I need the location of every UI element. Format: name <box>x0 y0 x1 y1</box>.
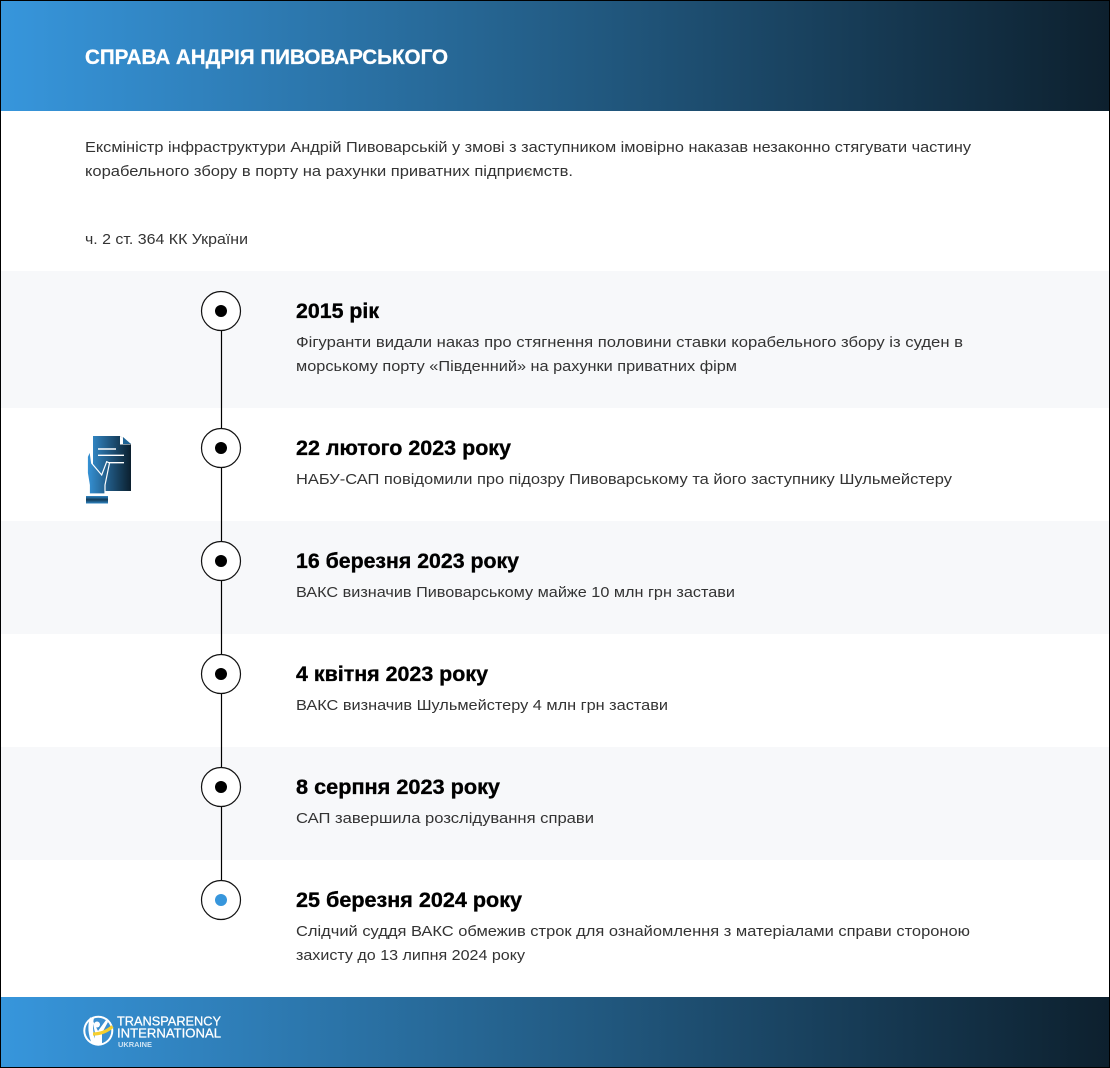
timeline entry: 4 April 2023 <box>202 654 668 714</box>
timeline entry: 25 March 2024 <box>202 880 970 964</box>
timeline entry: 22 February 2023: НАБУ-САП повідомили про підозру Пивоварському та його заступнику Шульмейстеру <box>296 471 953 488</box>
timeline entry: 16 March 2023 <box>202 542 735 601</box>
timeline entry: 25 March 2024: 25 березня 2024 року <box>296 889 522 912</box>
intro text <box>85 139 972 180</box>
timeline entry: 16 March 2023: ВАКС визначив Пивоварському майже 10 млн грн застави <box>296 584 735 601</box>
title: СПРАВА АНДРІЯ ПИВОВАРСЬКОГО <box>85 46 448 69</box>
icon: hand holding document <box>86 436 131 504</box>
timeline entry: 22 February 2023: 22 лютого 2023 року <box>296 437 511 460</box>
logo: Transparency International Ukraine: UKRAINE <box>118 1042 152 1049</box>
intro text: Ексміністр інфраструктури Андрій Пивоварській у змові з заступником імовірно наказав незаконно стягувати частину <box>85 139 972 156</box>
timeline entry: 8 August 2023 <box>202 768 594 827</box>
timeline entry: 8 August 2023: САП завершила розслідування справи <box>296 810 594 827</box>
logo: Transparency International Ukraine: TRANSPARENCY <box>117 1014 222 1028</box>
timeline entry: 25 March 2024: захисту до 13 липня 2024 року <box>296 947 526 964</box>
timeline entry: 2015: Фігуранти видали наказ про стягнення половини ставки корабельного збору із суден в <box>296 334 963 351</box>
timeline entry: 16 March 2023: 16 березня 2023 року <box>296 550 519 573</box>
timeline entry: 4 April 2023: ВАКС визначив Шульмейстеру 4 млн грн застави <box>296 697 668 714</box>
footer banner <box>1 997 1109 1067</box>
timeline entry: 2015: морському порту «Південний» на рахунки приватних фірм <box>296 358 737 375</box>
timeline vertical line <box>220 311 222 900</box>
timeline entry: 4 April 2023: 4 квітня 2023 року <box>296 663 488 686</box>
timeline entry: 2015: 2015 рік <box>296 300 379 323</box>
header banner <box>1 1 1109 111</box>
legal article reference: ч. 2 ст. 364 КК України <box>85 231 248 248</box>
timeline entry: 8 August 2023: 8 серпня 2023 року <box>296 776 500 799</box>
timeline entry: 22 February 2023 <box>202 428 953 488</box>
timeline entry: 2015 <box>202 292 963 375</box>
intro text: корабельного збору в порту на рахунки приватних підприємств. <box>85 163 573 180</box>
logo: Transparency International Ukraine <box>83 1014 222 1049</box>
logo: Transparency International Ukraine: INTERNATIONAL <box>117 1026 221 1040</box>
timeline background bands <box>1 271 1109 860</box>
timeline entry: 25 March 2024: Слідчий суддя ВАКС обмежив строк для ознайомлення з матеріалами справи стороною <box>296 923 970 940</box>
